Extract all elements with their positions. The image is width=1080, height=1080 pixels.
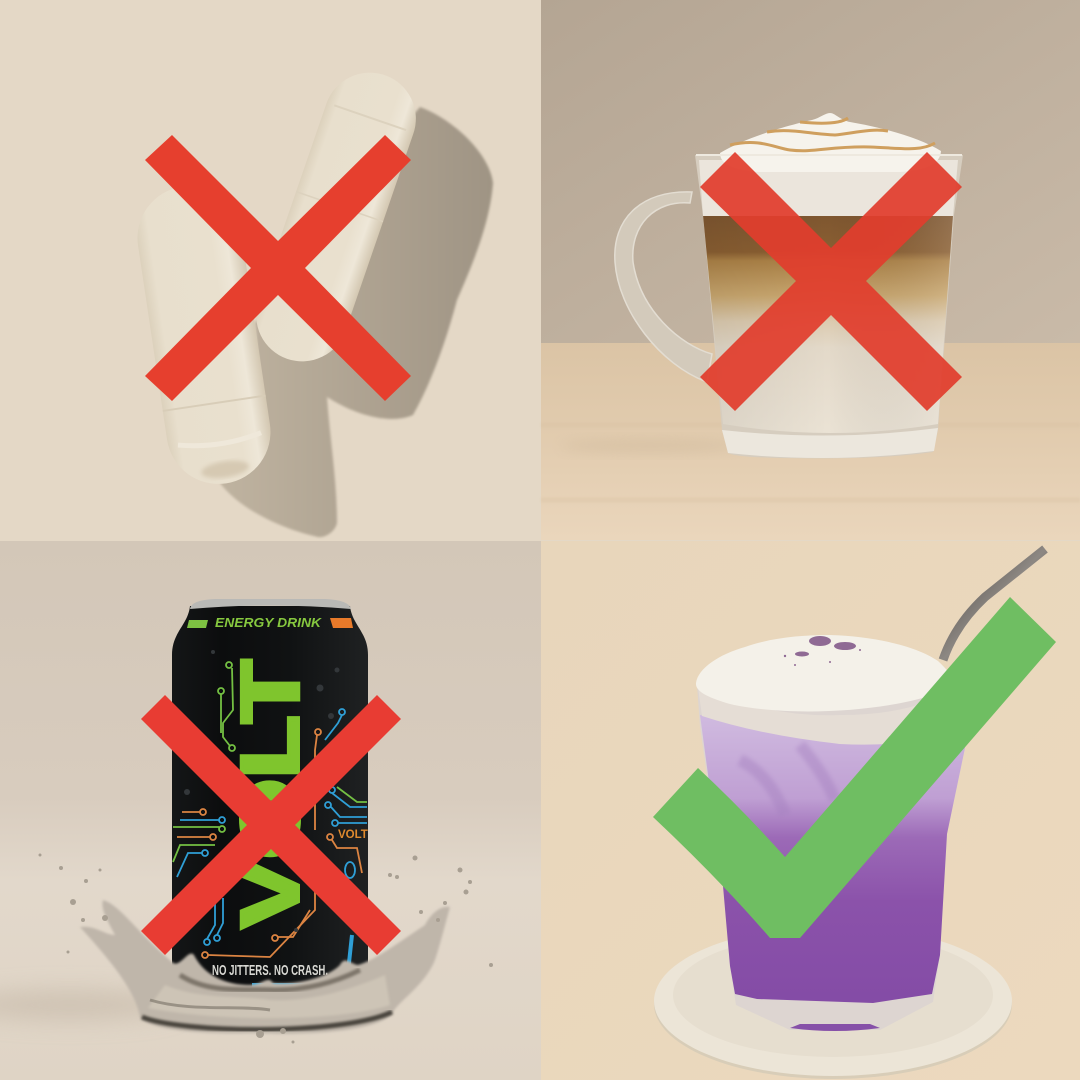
icon: volt can xyxy=(172,599,368,1005)
text: small brand mark: VOLT xyxy=(338,829,368,841)
icon: red cross xyxy=(141,695,401,955)
liquid: foam collar xyxy=(698,683,963,745)
icon: metal straw xyxy=(943,549,1045,660)
icon: latte glass xyxy=(695,113,963,458)
icon: can water drops xyxy=(184,650,340,932)
liquid: milk foam xyxy=(699,160,958,216)
icon: right capsule xyxy=(244,60,428,374)
heading: can brand name: VOLT xyxy=(225,660,316,928)
icon: water droplets xyxy=(38,854,493,1044)
icon: purple dust xyxy=(784,636,861,666)
icon: mug handle xyxy=(615,192,712,382)
liquid: white foam dome xyxy=(696,635,952,711)
text: can tagline: NO JITTERS. NO CRASH. xyxy=(212,962,328,979)
icon: saucer xyxy=(654,926,1012,1079)
icon: left capsule xyxy=(130,179,278,491)
icon: purple drink glass xyxy=(696,635,965,1031)
panel: energy drink xyxy=(0,541,541,1080)
icon: caramel drizzle xyxy=(730,118,935,151)
icon: capsule shadow xyxy=(220,107,493,537)
icon: water splash crown xyxy=(80,900,450,1034)
panel: purple drink xyxy=(541,541,1080,1080)
heading: can label top: ENERGY DRINK xyxy=(215,615,323,630)
liquid: purple drink xyxy=(700,715,965,1003)
icon: red cross xyxy=(700,152,962,411)
panel: latte xyxy=(541,0,1080,540)
icon: green check xyxy=(653,597,1056,938)
icon: red cross xyxy=(145,135,411,401)
icon: circuit traces xyxy=(173,662,367,985)
panel: capsules xyxy=(0,0,541,540)
liquid: coffee and milk layers xyxy=(703,215,953,433)
